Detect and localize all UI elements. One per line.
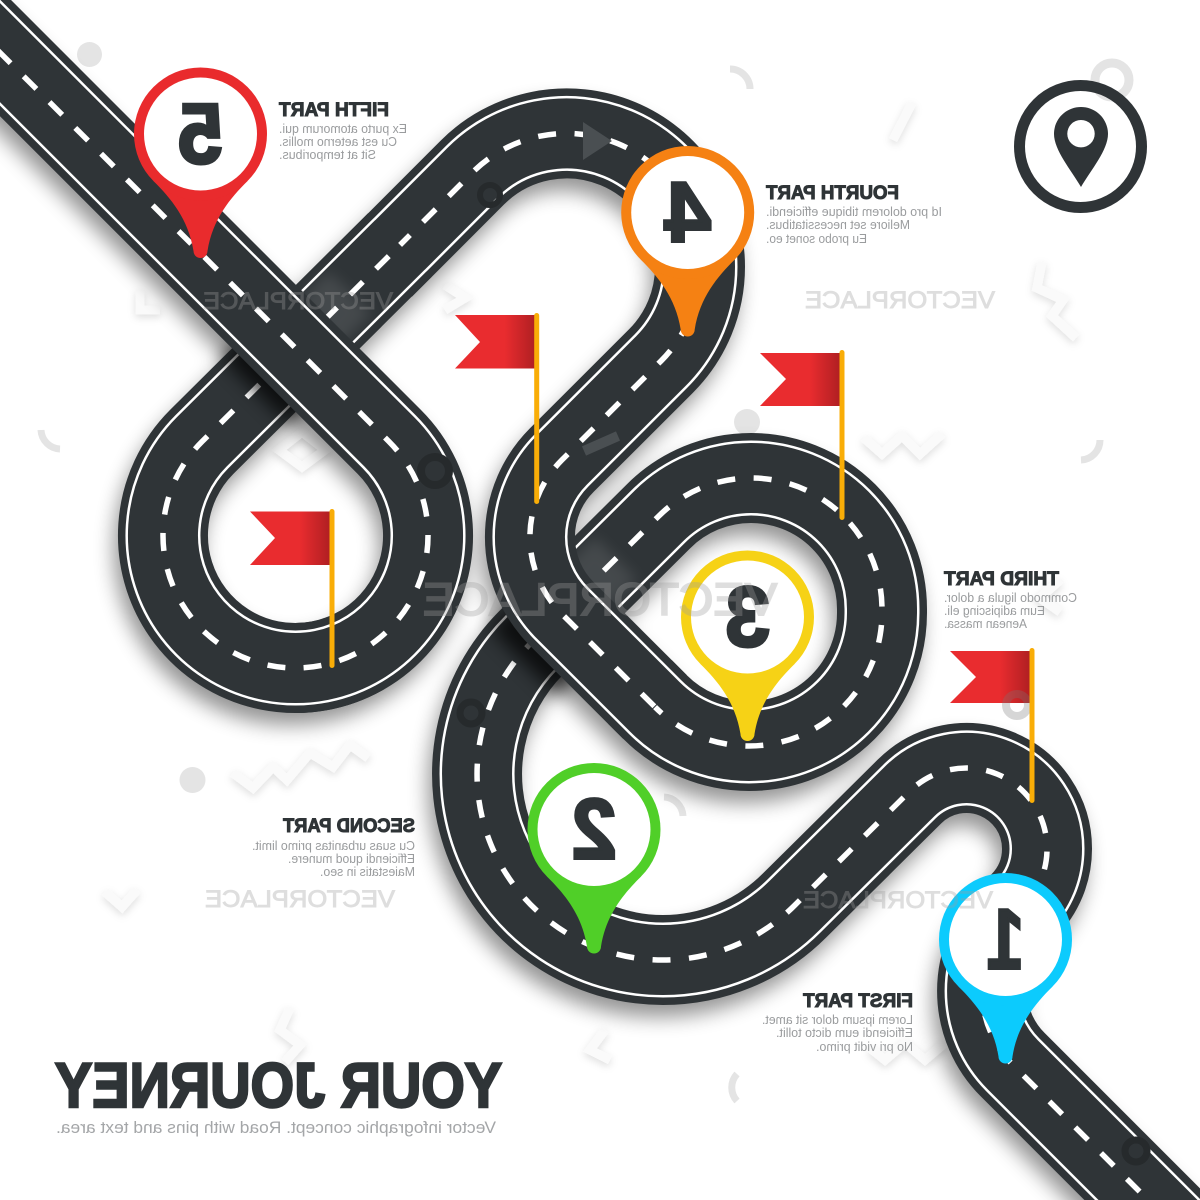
watermarks: VECTORPLACE xyxy=(803,887,993,914)
text: fourth part: Id pro dolorem tibique efficiendi. xyxy=(766,205,942,219)
text: second part: Maiestatis in seo. xyxy=(320,865,415,879)
text: fifth part: Cu est aeterno mollis. xyxy=(279,135,397,149)
road: descent into the loop xyxy=(163,225,420,668)
text: fourth part: FOURTH PART xyxy=(766,182,899,204)
pin 3: 3 xyxy=(725,569,770,664)
icon: location pin in ring xyxy=(1020,86,1142,208)
road: section from first part to third part xyxy=(477,478,1185,1200)
text: fourth part: Eu probo sonet eo. xyxy=(766,232,867,246)
watermarks: VECTORPLACE xyxy=(423,574,777,625)
lower-road crossing shading near fifth part xyxy=(252,292,350,394)
text: first part xyxy=(762,990,913,1054)
watermarks xyxy=(203,287,995,914)
text: third part xyxy=(944,568,1077,631)
pin 4 xyxy=(621,146,754,336)
text: fifth part: Sit at temporibus. xyxy=(279,148,376,162)
text: fourth part xyxy=(766,182,942,246)
flag: loop xyxy=(250,509,334,668)
pin 2: 2 xyxy=(572,782,616,877)
text: first part: Efficiendi eum dicto tollit. xyxy=(776,1026,913,1040)
road overlay marks xyxy=(421,122,1147,1162)
text: first part: No pri vidit primo. xyxy=(816,1040,913,1054)
pin 1 xyxy=(939,873,1072,1064)
pin 2 xyxy=(528,763,660,954)
text: first part: FIRST PART xyxy=(803,990,913,1012)
pin 5 xyxy=(134,68,267,258)
text: second part xyxy=(252,815,415,879)
text: third part: THIRD PART xyxy=(944,568,1059,590)
text: first part: Lorem ipsum dolor sit amet. xyxy=(762,1013,913,1027)
text: second part: Efficiendi quod munere. xyxy=(288,852,415,866)
watermarks: VECTORPLACE xyxy=(203,288,393,315)
background decoration: faint white zigzags xyxy=(105,103,1076,1062)
text: third part: Aenean massa. xyxy=(944,617,1027,631)
text: fifth part: FIFTH PART xyxy=(279,99,389,121)
road: loop exit to top-left xyxy=(0,13,428,668)
watermarks: VECTORPLACE xyxy=(805,287,995,314)
text: fourth part: Meliore set necessitatibus. xyxy=(766,218,910,232)
text: second part: SECOND PART xyxy=(283,815,415,837)
pin 4: 4 xyxy=(664,166,711,260)
pin 5: 5 xyxy=(178,86,223,181)
text: fifth part: Ex purto atomorum qui. xyxy=(279,122,407,136)
road: section from third part to top bend xyxy=(380,133,700,732)
flag: upper right xyxy=(760,350,844,520)
text: third part: Eum adipiscing eli. xyxy=(944,604,1045,618)
pin 3 xyxy=(681,550,814,741)
text: third part: Commodo ligula a dolor. xyxy=(944,591,1077,605)
flag: center xyxy=(455,313,539,504)
pin 1: 1 xyxy=(987,893,1024,987)
title: YOUR JOURNEY xyxy=(55,1051,502,1121)
subtitle: Vector infographic concept. Road with pins and text area. xyxy=(56,1118,496,1137)
text: fifth part xyxy=(279,99,407,162)
lower-road crossing shading near third part xyxy=(520,558,616,665)
flag: right xyxy=(950,648,1034,803)
text: second part: Cu suas urbanitas primo limit. xyxy=(252,839,415,853)
watermarks: VECTORPLACE xyxy=(205,886,395,913)
